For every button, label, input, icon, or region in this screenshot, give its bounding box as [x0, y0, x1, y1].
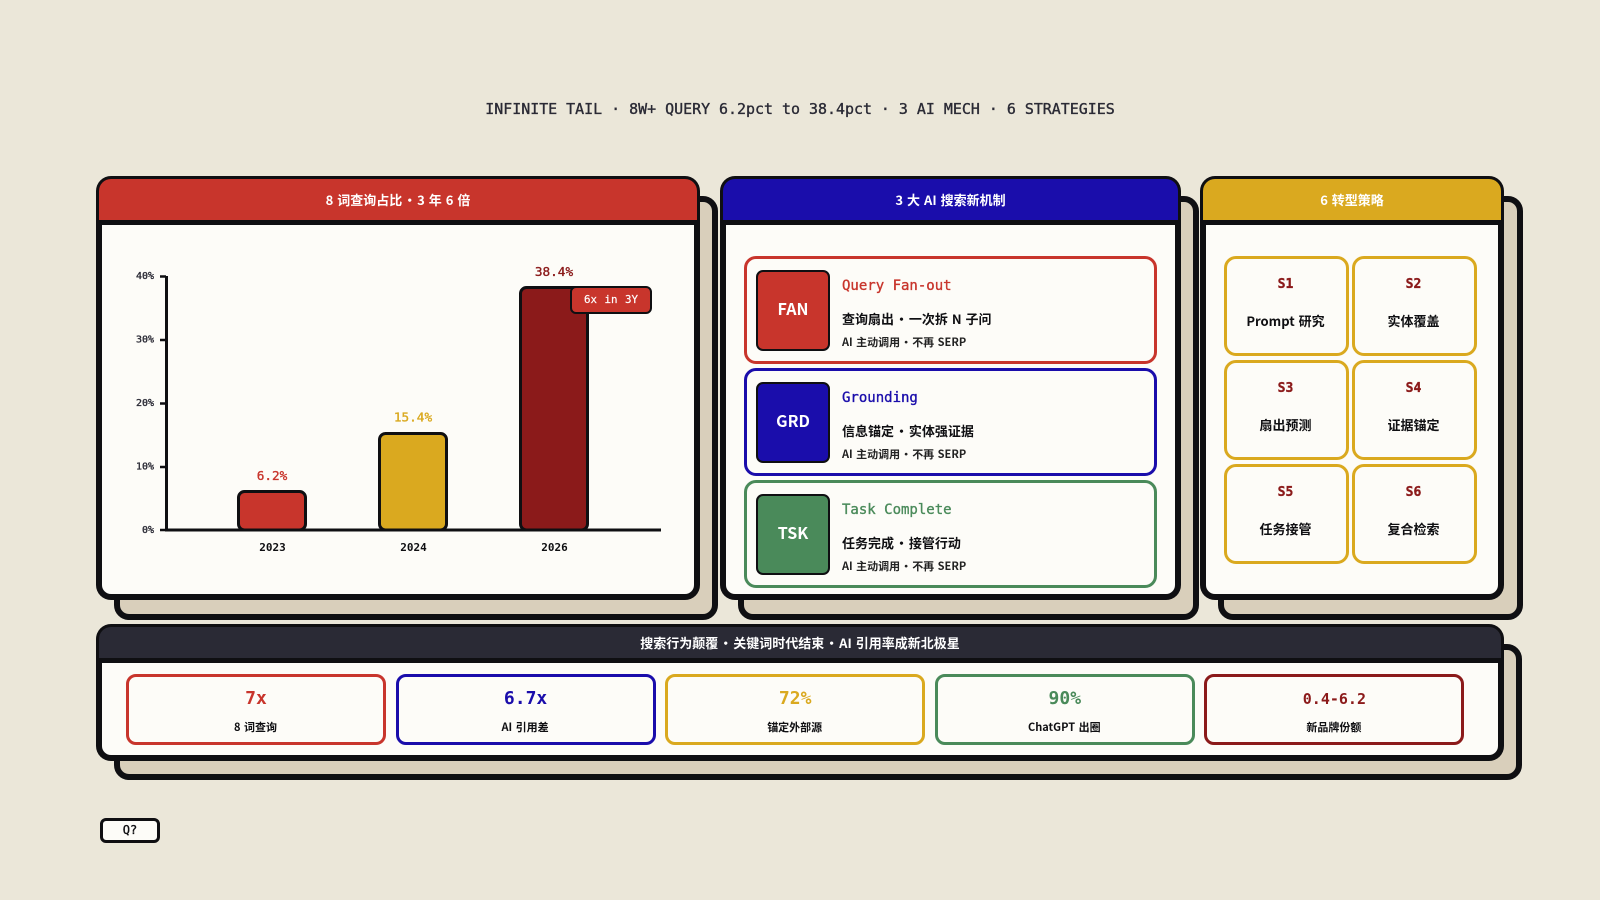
mechanisms heading [723, 179, 1178, 220]
stat label: AI 引用差 [502, 719, 549, 735]
stat: 6.7x [396, 674, 656, 745]
bar 2026: 38.4% [535, 264, 573, 279]
button: Q? [100, 818, 160, 843]
mechanism card: Grounding [744, 368, 1157, 476]
icon: GRD [756, 382, 830, 463]
summary body [102, 663, 1498, 755]
mechanism note: AI 主动调用 · 不再 SERP [842, 446, 966, 462]
icon: FAN: FAN [778, 296, 808, 320]
panel shadow: chart [114, 196, 718, 620]
stat: 7x [126, 674, 386, 745]
strategy S2 [1352, 256, 1477, 356]
button: Q?: Q? [123, 823, 137, 837]
mechanism note: AI 主动调用 · 不再 SERP [842, 334, 966, 350]
chart panel body [102, 225, 694, 594]
mechanism note: AI 主动调用 · 不再 SERP [842, 558, 966, 574]
mechanism name: Query Fan-out [842, 278, 952, 294]
summary heading [99, 627, 1501, 658]
y axis labels: 20% [136, 398, 154, 409]
panel shadow: summary [114, 644, 1522, 780]
strategy code: S4 [1406, 381, 1421, 396]
panel: summary [96, 624, 1504, 761]
bar 2024 [380, 410, 446, 530]
callout: 6x in 3Y [571, 287, 651, 313]
icon: GRD: GRD [776, 408, 810, 432]
stat label: 8 词查询 [234, 719, 277, 735]
strategy S5 [1224, 464, 1349, 564]
stat label: 锚定外部源 [767, 719, 822, 735]
chart panel heading: 8 词查询占比 · 3 年 6 倍 [326, 190, 470, 209]
mechanism description: 信息锚定 · 实体强证据 [842, 421, 974, 440]
panel shadow: mechanisms [738, 196, 1199, 620]
stat value: 0.4-6.2 [1303, 690, 1366, 708]
strategy name: 证据锚定 [1387, 415, 1440, 434]
chart axes [160, 276, 661, 532]
summary heading: 搜索行为颠覆 · 关键词时代结束 · AI 引用率成新北极星 [640, 633, 960, 652]
y axis labels: 30% [136, 334, 154, 346]
stat value: 7x [245, 688, 267, 709]
bar 2023 [238, 468, 306, 530]
panel: strategies [1200, 176, 1504, 600]
x axis labels: 2024 [400, 541, 427, 554]
stat label: ChatGPT 出圈 [1028, 719, 1101, 735]
panel: mechanisms [720, 176, 1181, 600]
mechanism description: 任务完成 · 接管行动 [842, 533, 961, 552]
strategies heading [1203, 179, 1501, 220]
strategy code: S2 [1406, 277, 1421, 292]
stat value: 72% [779, 688, 811, 709]
mechanism name: Task Complete [842, 502, 952, 518]
strategy code: S3 [1278, 381, 1293, 396]
mechanism card: Task Complete [744, 480, 1157, 588]
strategy name: 复合检索 [1387, 519, 1440, 538]
x axis labels: 2023 [259, 541, 286, 554]
stat label: 新品牌份额 [1306, 719, 1361, 735]
strategy name: Prompt 研究 [1246, 311, 1325, 330]
stat value: 90% [1049, 688, 1081, 709]
strategy S4 [1352, 360, 1477, 460]
bar 2023: 6.2% [257, 468, 288, 483]
y axis labels: 0% [142, 525, 154, 536]
stat: 0.4-6.2 [1204, 674, 1464, 745]
stat value: 6.7x [504, 688, 547, 709]
bar 2026 [520, 264, 588, 530]
strategy S1 [1224, 256, 1349, 356]
strategies heading: 6 转型策略 [1320, 190, 1384, 209]
mechanisms body [726, 225, 1175, 594]
strategy name: 扇出预测 [1259, 415, 1312, 434]
x axis labels [259, 541, 568, 554]
mechanism name: Grounding [842, 390, 918, 406]
mechanism card: Query Fan-out [744, 256, 1157, 364]
subtitle: INFINITE TAIL · 8W+ QUERY 6.2pct to 38.4pct · 3 AI MECH · 6 STRATEGIES [485, 100, 1115, 118]
strategy code: S5 [1278, 485, 1293, 500]
strategy name: 实体覆盖 [1387, 311, 1440, 330]
strategies body [1206, 225, 1498, 594]
strategy code: S1 [1278, 277, 1293, 292]
mechanism description: 查询扇出 · 一次拆 N 子问 [842, 309, 992, 328]
y axis labels: 40% [136, 271, 154, 282]
icon: TSK: TSK [778, 520, 808, 544]
icon: TSK [756, 494, 830, 575]
strategy code: S6 [1406, 485, 1421, 500]
chart panel heading [99, 179, 697, 220]
icon: FAN [756, 270, 830, 351]
panel: chart [96, 176, 700, 600]
callout: 6x in 3Y: 6x in 3Y [584, 293, 638, 306]
y axis labels [136, 271, 154, 536]
strategy S3 [1224, 360, 1349, 460]
mechanisms heading: 3 大 AI 搜索新机制 [895, 190, 1006, 209]
y axis labels: 10% [136, 462, 154, 472]
strategy name: 任务接管 [1259, 519, 1312, 538]
x axis labels: 2026 [541, 541, 568, 554]
stat: 90% [935, 674, 1195, 745]
bar 2024: 15.4% [394, 410, 432, 424]
panel shadow: strategies [1218, 196, 1523, 620]
stat: 72% [665, 674, 925, 745]
strategy S6 [1352, 464, 1477, 564]
